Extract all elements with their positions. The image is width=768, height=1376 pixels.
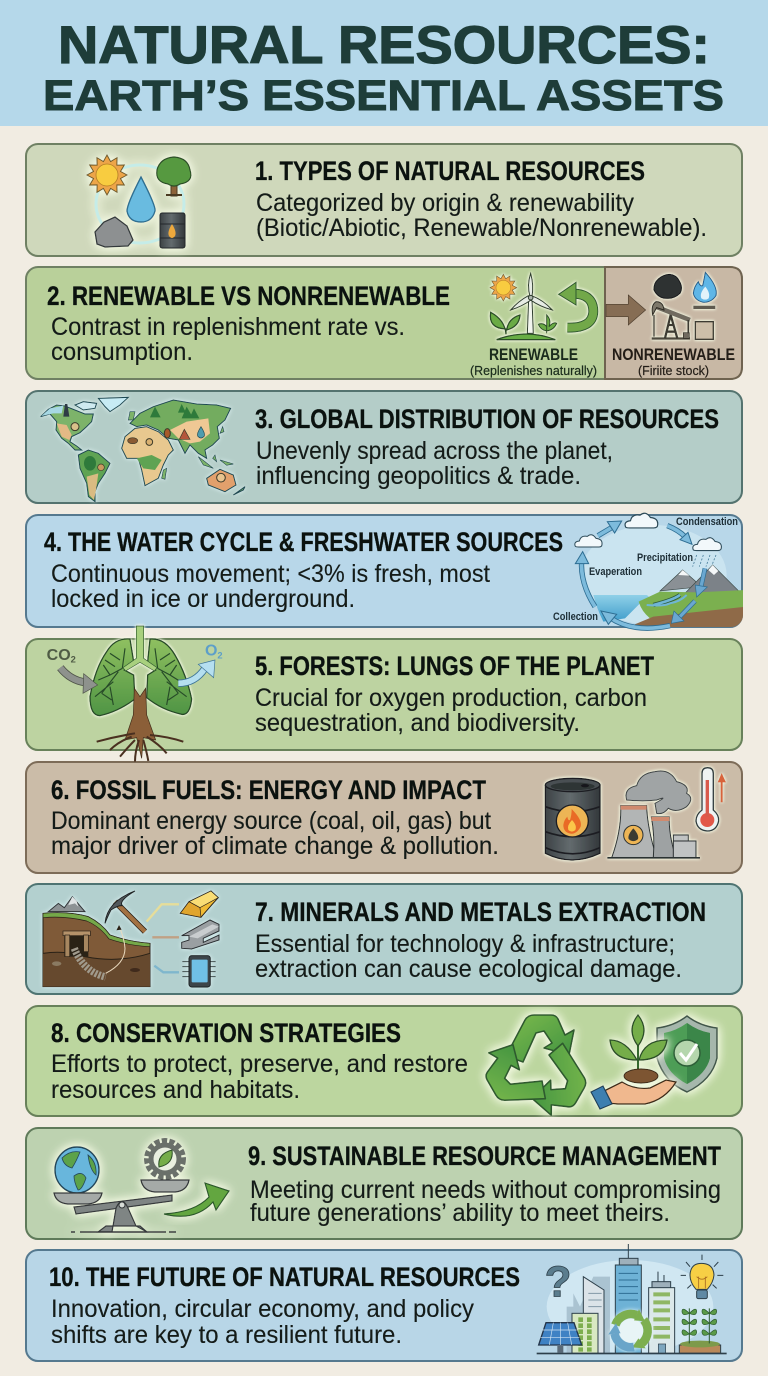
description: Unevenly spread across the planet, [256,437,613,465]
description [51,313,405,366]
description [51,1295,474,1349]
description: Contrast in replenishment rate vs. [51,313,405,341]
diagram labels: Collection [553,611,598,623]
arrow: CO2 in [60,668,98,693]
diagram labels: Condensation [676,516,738,528]
description: Efforts to protect, preserve, and restore [51,1050,468,1078]
description [255,684,647,737]
panel 9: sustainable management [26,1128,742,1239]
arrow: renewable to nonrenewable [606,295,646,325]
angled building [583,1277,604,1353]
description: Innovation, circular economy, and policy [51,1295,474,1323]
panel 8: conservation [26,1006,742,1123]
icon: power plant with smoke [607,771,700,859]
description [256,189,707,242]
panel 5: forests [26,626,742,762]
light bulb [681,1255,723,1299]
panel 6: fossil fuels [26,762,742,873]
icon: city, solar, recycling, bulb, plants [537,1244,727,1355]
icon cluster: sun, tree, water, rock, barrel [87,155,191,248]
recycling ring [605,1309,658,1355]
heading: 8. CONSERVATION STRATEGIES [51,1018,401,1048]
icon: renewable sun, wind turbine, plants, cycle arrow [490,273,593,340]
description: locked in ice or underground. [51,585,355,613]
connector lines [147,904,179,972]
label: renewable: RENEWABLE [489,345,578,364]
cycle arrows [575,521,707,628]
background skyline [567,1277,610,1353]
description: sequestration, and biodiversity. [255,709,580,737]
description: consumption. [51,338,193,366]
description: Dominant energy source (coal, oil, gas) but [51,807,491,835]
panel 7: minerals and metals [26,884,742,994]
right building [649,1272,675,1353]
label: nonrenewable: NONRENEWABLE [612,345,735,364]
title line 1: NATURAL RESOURCES: [58,16,710,75]
title banner [0,0,768,126]
label: CO2: 2 [71,655,76,665]
tall tower [615,1244,641,1353]
panel 4: water cycle [26,513,747,628]
arrow: O2 out [178,660,215,683]
plant bed [679,1308,721,1353]
label: O2: 2 [217,650,223,660]
diagram labels: Evaperation [589,566,642,578]
icon: oil barrel with flame [545,778,600,860]
description: resources and habitats. [51,1076,300,1104]
description [250,1176,721,1227]
description: Categorized by origin & renewability [256,189,634,217]
solar panel [539,1323,582,1353]
heading: 5. FORESTS: LUNGS OF THE PLANET [255,651,654,681]
label: CO2: CO [47,647,71,664]
description: shifts are key to a resilient future. [51,1321,402,1349]
description: major driver of climate change & pollution. [51,832,499,860]
heading: 1. TYPES OF NATURAL RESOURCES [255,156,645,186]
icon: balance scale with earth and gear [54,1142,189,1232]
icon: hand holding seedling [591,1015,676,1109]
world map with resource markers [41,397,245,502]
label: nonrenewable [612,345,735,378]
arrow: green growth [164,1183,229,1216]
nonrenewable half [605,267,742,379]
diagram labels [553,516,738,623]
title line 2: EARTH’S ESSENTIAL ASSETS [43,72,724,120]
description [255,930,682,983]
label: nonrenewable: (Firiite stock) [638,363,709,378]
heading: 4. THE WATER CYCLE & FRESHWATER SOURCES [44,527,563,557]
description [51,1050,468,1104]
icon: pickaxe [105,891,145,932]
label: renewable [470,345,597,378]
panel 1: types of natural resources [26,144,742,256]
description: (Biotic/Abiotic, Renewable/Nonrenewable). [256,214,707,242]
description: Essential for technology & infrastructure; [255,930,675,958]
icon: mine cross-section [43,897,150,987]
landscape [580,525,747,628]
description: future generations’ ability to meet theirs. [250,1199,670,1227]
description: Meeting current needs without compromising [250,1176,721,1204]
panel 3: global distribution [26,391,742,503]
green building [572,1313,598,1353]
heading: 6. FOSSIL FUELS: ENERGY AND IMPACT [51,775,486,805]
heading: 10. THE FUTURE OF NATURAL RESOURCES [49,1262,520,1292]
heading: 2. RENEWABLE VS NONRENEWABLE [47,281,450,311]
description [256,437,613,490]
panel 2: renewable vs nonrenewable [26,267,742,379]
ground line [537,1353,727,1354]
label: renewable: (Replenishes naturally) [470,363,597,378]
label: O2: O [205,643,217,660]
icon: gold bar [180,891,218,917]
panel 10: the future [26,1244,742,1361]
description: influencing geopolitics & trade. [256,462,581,490]
description: Continuous movement; <3% is fresh, most [51,560,490,588]
description [51,560,490,613]
icon: thermometer and rising arrow [696,768,726,831]
icon: smartphone chip [182,956,216,987]
description: extraction can cause ecological damage. [255,955,682,983]
icon: steel beam [182,920,219,949]
question mark: ? [545,1258,572,1307]
description: Crucial for oxygen production, carbon [255,684,647,712]
icon: nonrenewable coal, gas flame, oil pump [652,272,716,340]
icon: lungs tree [90,626,192,762]
icon: shield with check [657,1016,717,1092]
water cycle diagram [553,513,747,628]
diagram labels: Precipitation [637,552,693,564]
icon: recycling arrows [476,1015,598,1123]
description [51,807,499,860]
clouds [575,513,721,551]
